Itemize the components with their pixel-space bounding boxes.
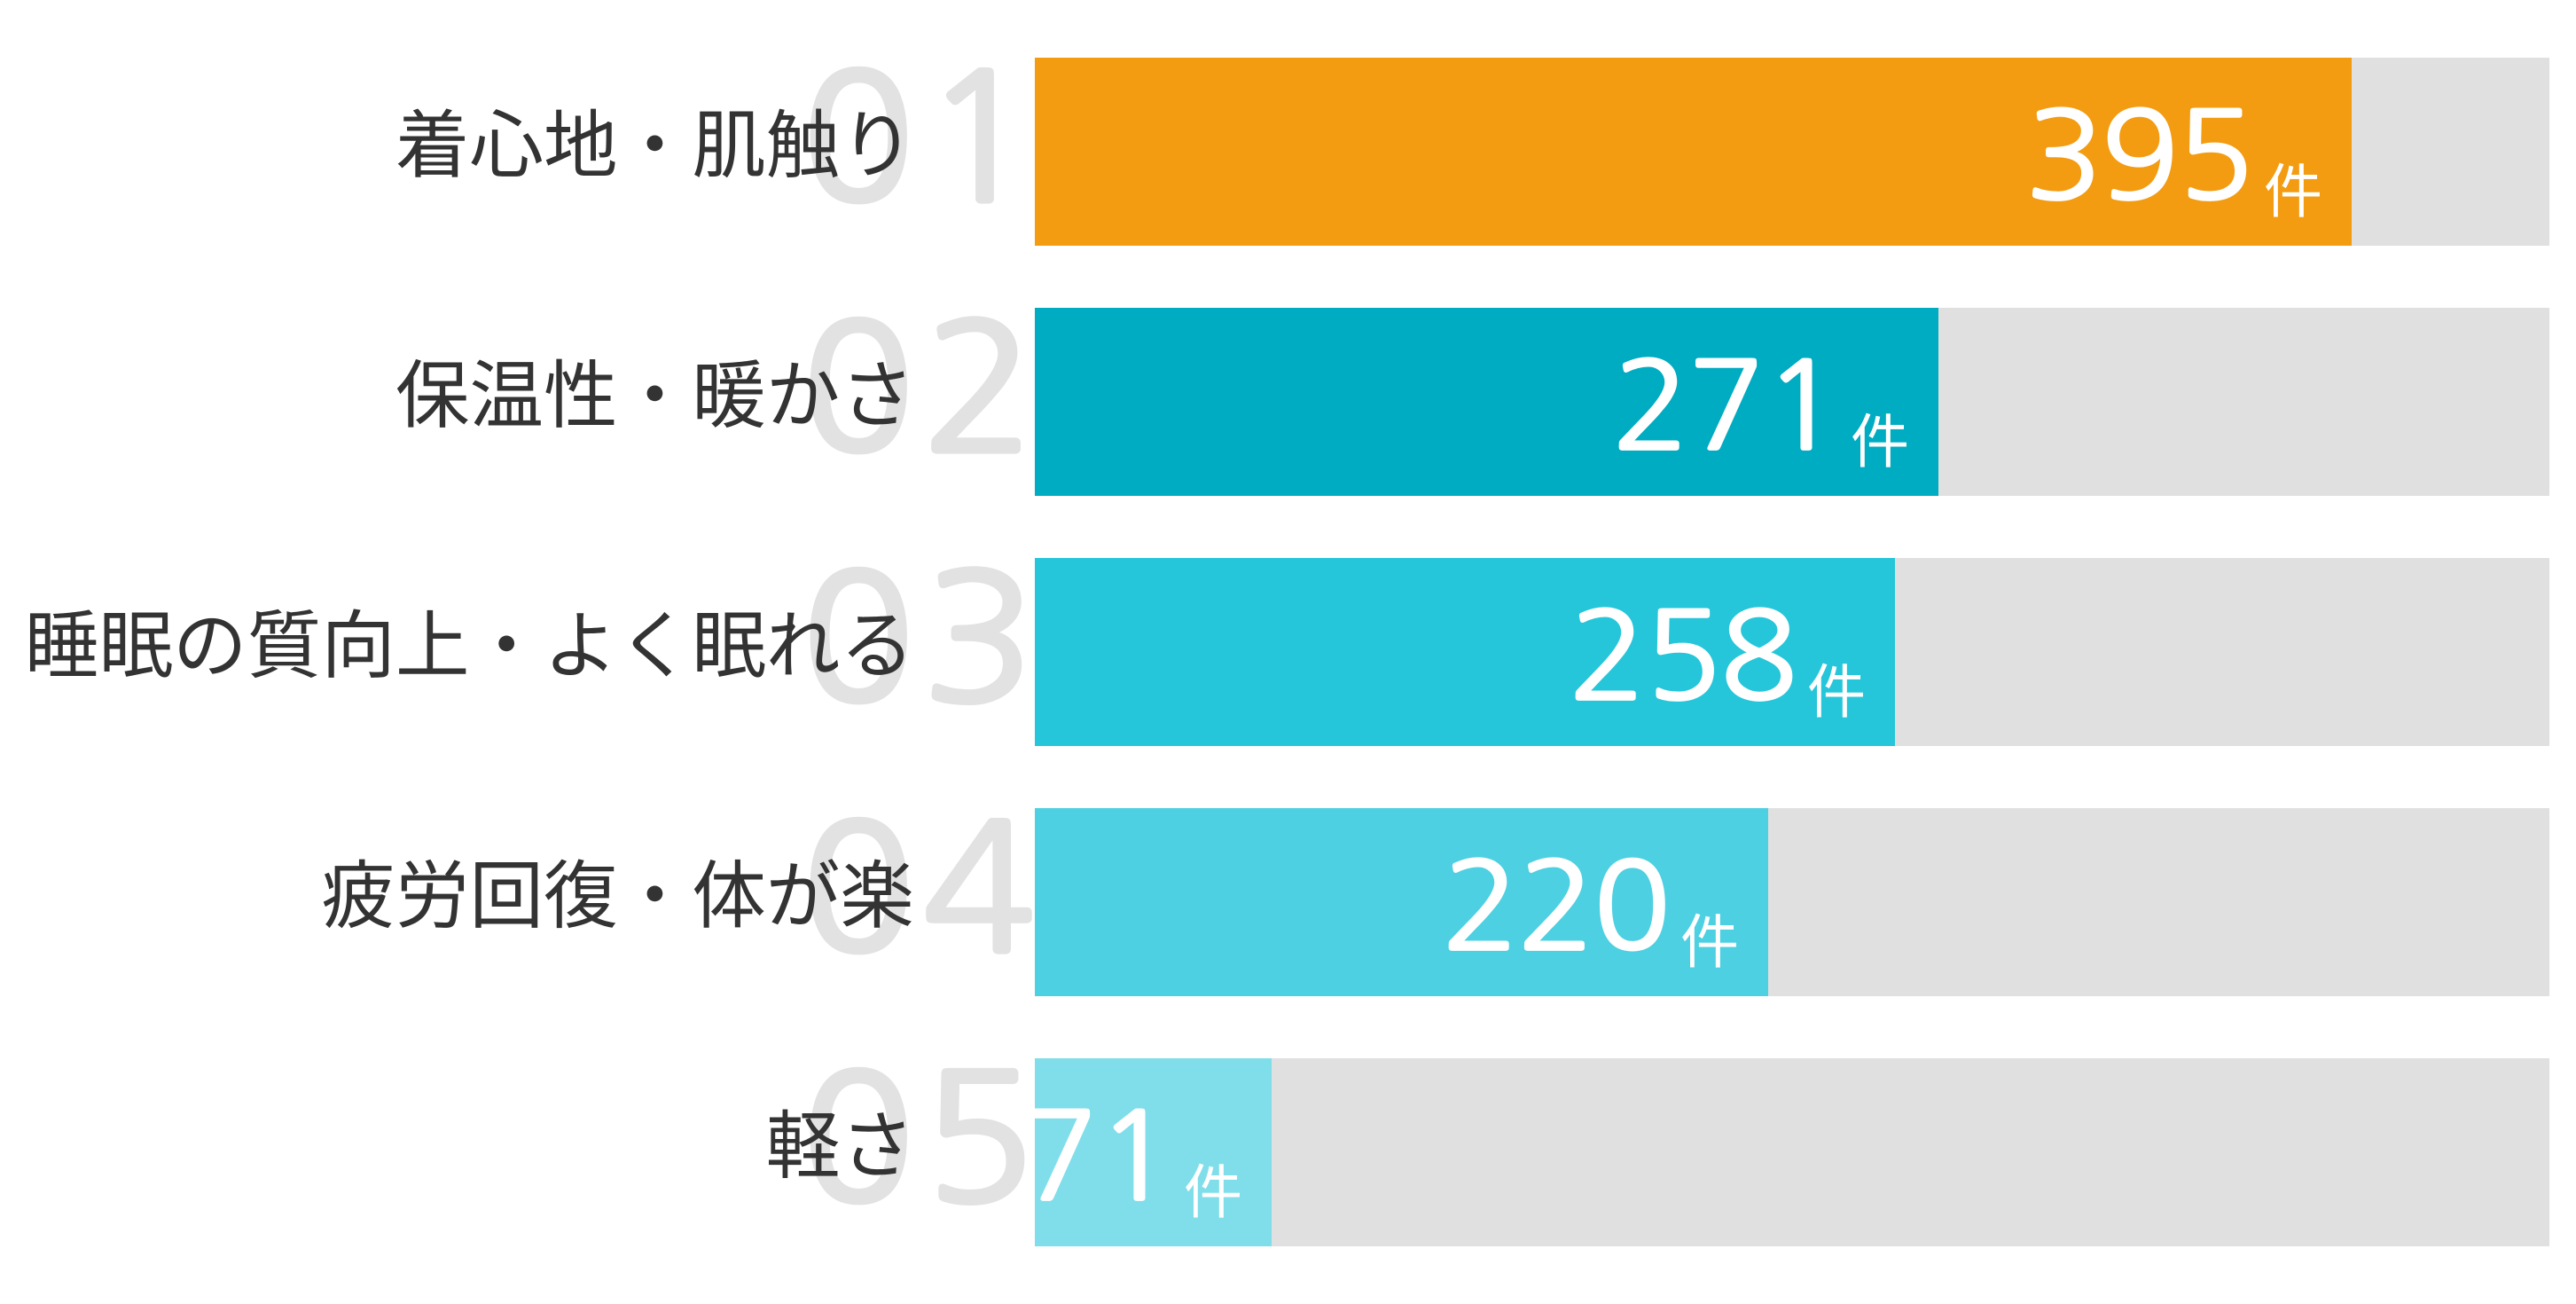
bar 258 — [1035, 558, 1895, 746]
label: 着心地・肌触り — [395, 104, 914, 187]
unit: 件 — [1184, 1159, 1242, 1225]
label: 疲労回復・体が楽 — [321, 854, 914, 938]
value 220: 220 — [1442, 847, 1669, 967]
rank number 05: 05 — [802, 1051, 1044, 1227]
unit: 件 — [1851, 409, 1909, 475]
row 4: 疲労回復・体が楽 — [321, 801, 2549, 996]
row 2: 保温性・暖かさ — [395, 301, 2549, 496]
rank number 04: 04 — [802, 801, 1044, 977]
track — [1035, 808, 2549, 996]
value 258: 258 — [1569, 597, 1796, 717]
unit: 件 — [1807, 659, 1866, 725]
bar 71 — [1035, 1058, 1272, 1246]
rank number 02: 02 — [802, 301, 1044, 476]
rank number 01: 01 — [802, 51, 1044, 226]
label: 軽さ — [766, 1104, 914, 1188]
unit: 件 — [2264, 159, 2322, 224]
bar 271 — [1035, 308, 1938, 496]
row 3: 睡眠の質向上・よく眠れる — [25, 551, 2549, 746]
track — [1035, 1058, 2549, 1246]
row 5: 軽さ — [766, 1051, 2549, 1246]
value 395: 395 — [2025, 97, 2252, 216]
value 71 (clipped by bar): 71 — [1022, 1097, 1172, 1217]
track — [1035, 308, 2549, 496]
track — [1035, 558, 2549, 746]
bar 220 — [1035, 808, 1768, 996]
unit: 件 — [1680, 909, 1739, 975]
bar 395 — [1035, 58, 2352, 246]
value 271: 271 — [1612, 347, 1839, 467]
label: 睡眠の質向上・よく眠れる — [25, 604, 914, 687]
rank number 03: 03 — [802, 551, 1044, 727]
row 1: 着心地・肌触り — [395, 51, 2549, 246]
label: 保温性・暖かさ — [395, 354, 914, 437]
track — [1035, 58, 2549, 246]
